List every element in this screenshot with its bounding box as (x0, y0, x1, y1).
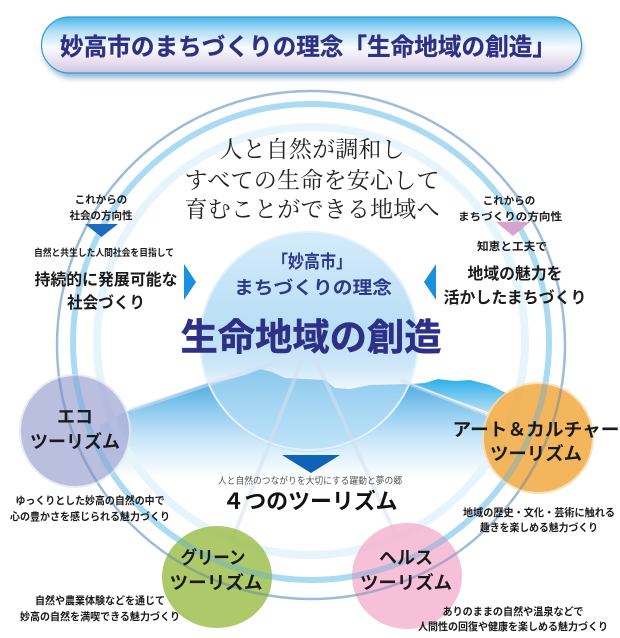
label: art and culture tourism: ツーリズム (490, 443, 582, 464)
right direction block: これからの (483, 195, 535, 207)
circle: art and culture tourism (483, 383, 593, 493)
label: green tourism (170, 547, 262, 593)
art and culture description: 地域の歴史・文化・芸術に触れる (463, 506, 615, 519)
central philosophy text: まちづくりの理念 (234, 278, 392, 298)
label: art and culture tourism: アート＆カルチャー (452, 420, 620, 440)
tagline: 人と自然が調和し (220, 137, 404, 162)
central philosophy text: 生命地域の創造 (180, 317, 442, 358)
rings showing through the tourism circles (58, 375, 562, 596)
right direction block: 地域の魅力を (468, 264, 562, 283)
rays from centre to tourism circles (130, 352, 490, 540)
central circle (200, 232, 418, 452)
title banner: 妙高市のまちづくりの理念「生命地域の創造」 (60, 34, 556, 61)
right direction block (444, 195, 586, 307)
right direction block: 活かしたまちづくり (444, 289, 586, 307)
tagline (184, 137, 440, 222)
label: health tourism: ツーリズム (360, 572, 452, 593)
art and culture description (463, 506, 615, 534)
label: eco tourism: ツーリズム (30, 431, 120, 452)
tagline: 育むことができる地域へ (184, 197, 440, 222)
label: green tourism: グリーン (180, 547, 246, 568)
left direction block (34, 194, 178, 312)
health description: 人間性の回復や健康を楽しめる魅力づくり (418, 620, 608, 633)
eco description: 心の豊かさを感じられる魅力づくり (10, 510, 170, 523)
concentric rings (57, 91, 565, 599)
label: health tourism (360, 548, 452, 593)
central philosophy text (180, 252, 442, 358)
health description: ありのままの自然や温泉などで (442, 605, 584, 618)
left direction block: これからの (75, 194, 127, 206)
label: art and culture tourism (452, 420, 620, 464)
four tourism heading: 人と自然のつながりを大切にする躍動と夢の郷 (218, 475, 402, 487)
green description (20, 594, 180, 623)
arrow: right to centre (424, 264, 436, 300)
mountain landscape (100, 379, 530, 480)
label: eco tourism: エコ (57, 407, 93, 427)
right direction block: 知恵と工夫で (477, 239, 547, 253)
label: health tourism: ヘルス (379, 548, 433, 568)
title banner (42, 17, 582, 78)
four tourism heading: ４つのツーリズム (222, 489, 398, 514)
label: eco tourism (30, 407, 120, 452)
left direction block: 持続的に発展可能な (34, 270, 178, 289)
label: green tourism: ツーリズム (170, 572, 262, 593)
circle: eco tourism (20, 375, 130, 487)
left direction block: 社会の方向性 (70, 209, 133, 222)
arrow: down to tourism (282, 455, 340, 473)
eco description (10, 494, 170, 523)
green description: 妙高の自然を満喫できる魅力づくり (20, 610, 180, 623)
tagline: すべての生命を安心して (184, 168, 440, 193)
left direction block: 社会づくり (67, 294, 145, 312)
left direction block: 自然と共生した人間社会を目指して (34, 247, 174, 259)
central philosophy text: 「妙高市」 (272, 252, 352, 272)
arrow: left to centre (184, 264, 196, 300)
green description: 自然や農業体験などを通じて (35, 594, 165, 607)
art and culture description: 趣きを楽しめる魅力づくり (480, 521, 598, 534)
circle: health tourism (352, 523, 462, 629)
circle: green tourism (162, 526, 272, 628)
four tourism heading (218, 475, 402, 514)
health description (418, 605, 608, 633)
right direction block: まちづくりの方向性 (458, 210, 563, 223)
eco description: ゆっくりとした妙高の自然の中で (16, 494, 164, 507)
